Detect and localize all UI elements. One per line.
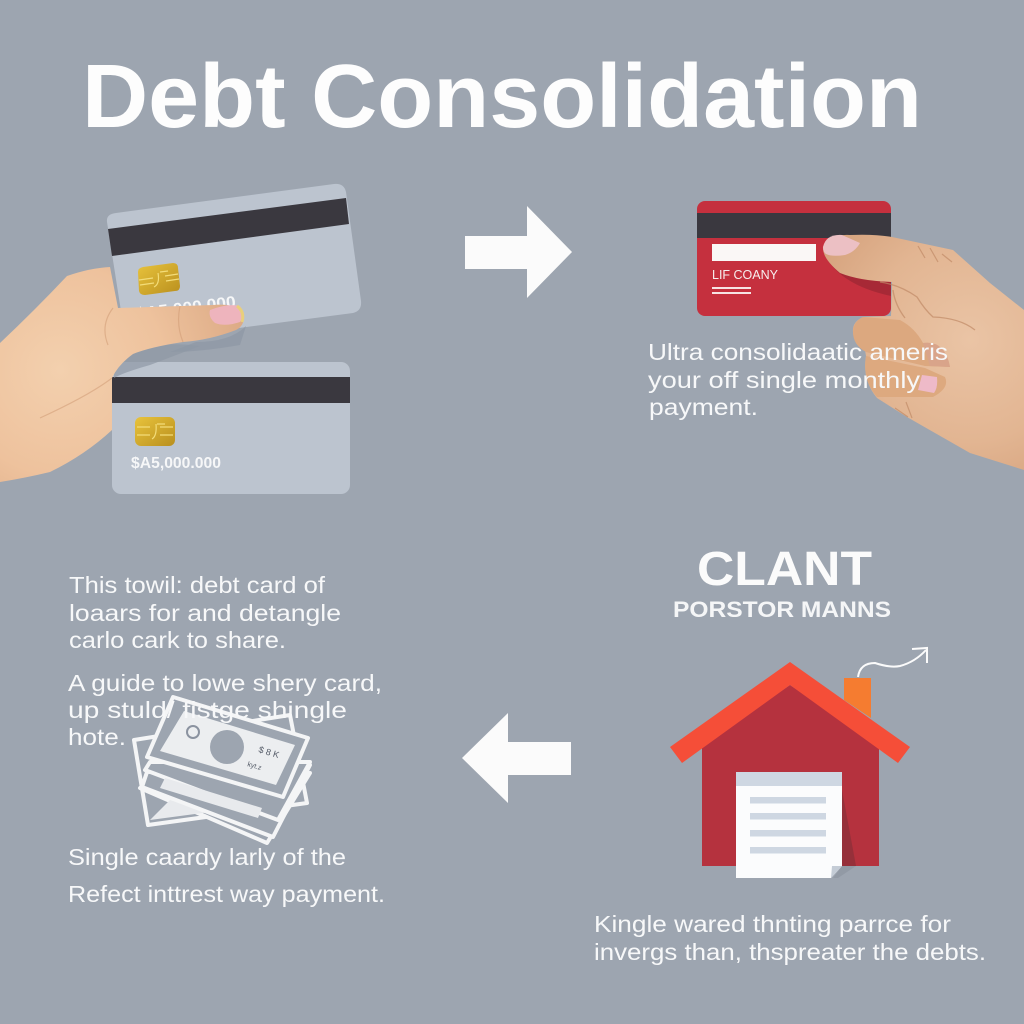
left hand holding cards <box>0 267 246 482</box>
text block: left third paragraph: Refect inttrest way payment. <box>68 881 385 907</box>
door shadow <box>842 790 856 866</box>
arrow: right <box>465 206 572 298</box>
right hand holding red card <box>823 235 1024 470</box>
text block: upper right: Ultra consolidaatic ameris <box>648 339 948 365</box>
text block: left third paragraph <box>68 844 385 907</box>
text block: upper right <box>648 339 948 420</box>
icon: stack of banknotes: $ 8 K <box>257 744 280 760</box>
text block: upper right: payment. <box>649 394 758 420</box>
text block: left first paragraph: loaars for and detangle <box>69 600 341 626</box>
red card: LIF COANY <box>712 268 779 282</box>
grey card: top, tilted: $A5,000.000 <box>135 294 237 323</box>
text block: left second paragraph: hote. <box>68 724 126 750</box>
house body <box>702 685 879 866</box>
grey card: top, tilted <box>107 184 361 343</box>
text block: left first paragraph: carlo cark to share. <box>69 627 286 653</box>
text block: lower right: invergs than, thspreater the debts. <box>594 939 986 965</box>
text block: left second paragraph <box>68 670 382 750</box>
icon: stack of banknotes <box>134 697 310 843</box>
roof <box>670 662 910 763</box>
text block: left third paragraph: Single caardy larly of the <box>68 844 346 870</box>
document <box>736 772 856 878</box>
icon: house with document <box>670 648 927 878</box>
text block: left first paragraph <box>69 572 341 653</box>
red card <box>697 201 891 316</box>
text block: left second paragraph: up stuld/ fistge shingle <box>68 697 347 723</box>
text block: left first paragraph: This towil: debt card of <box>69 572 326 598</box>
heading: CLANT: CLANT <box>697 543 872 596</box>
arrow: left <box>462 713 571 803</box>
text block: upper right: your off single monthly <box>648 367 921 393</box>
squiggle arrow <box>858 648 927 677</box>
grey card: bottom: $A5,000.000 <box>131 455 221 472</box>
text block: left second paragraph: A guide to lowe shery card, <box>68 670 382 696</box>
text block: lower right <box>594 911 986 965</box>
grey card: bottom <box>112 362 350 494</box>
subheading: PORSTOR MANNS: PORSTOR MANNS <box>673 597 891 622</box>
chimney <box>844 678 871 718</box>
icon: stack of banknotes: kyt.z <box>246 761 263 772</box>
text block: lower right: Kingle wared thnting parrce for <box>594 911 951 937</box>
title: Debt Consolidation <box>82 47 922 147</box>
